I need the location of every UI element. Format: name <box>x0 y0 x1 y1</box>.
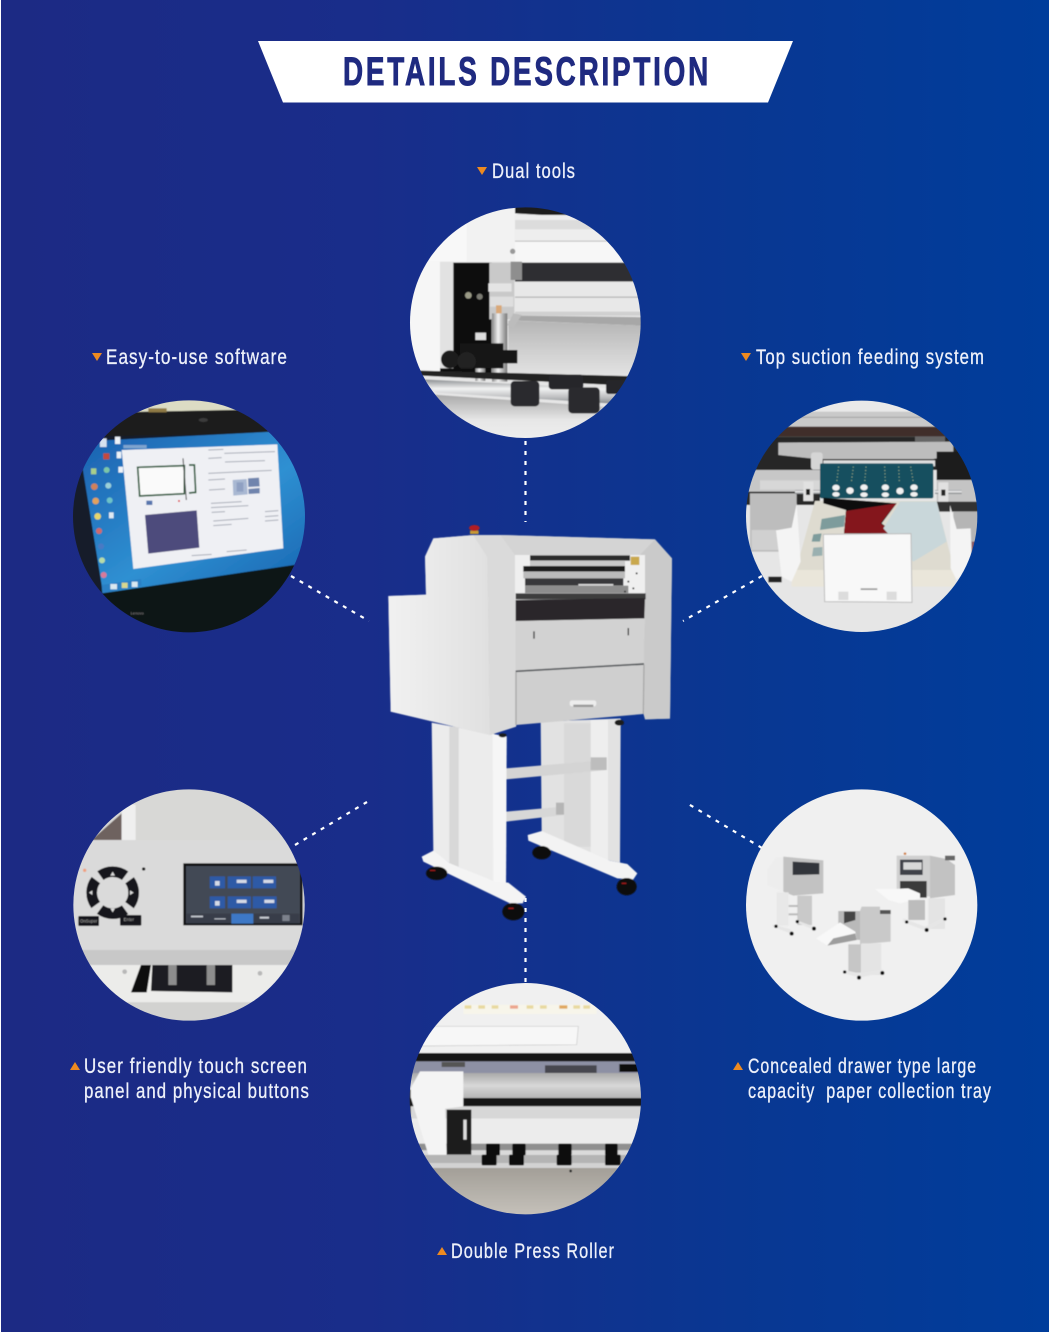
black guide bar <box>516 598 645 621</box>
connector: drawer circle to machine <box>685 802 762 848</box>
title banner <box>258 41 793 102</box>
label line 2: panel and physical buttons <box>84 1080 310 1103</box>
machine right side <box>640 539 672 719</box>
photo circle: double press roller <box>410 983 641 1214</box>
label: dual tools <box>477 160 576 183</box>
front leg <box>422 723 526 920</box>
back leg <box>528 718 637 895</box>
photo circle: easy-to-use software <box>73 400 305 632</box>
title text: DETAILS DESCRIPTION <box>343 50 711 94</box>
stand bolt <box>499 733 507 737</box>
connector: software circle to machine <box>291 576 369 621</box>
machine corner face <box>473 535 516 735</box>
connector: top circle to machine <box>524 441 527 522</box>
banner shape <box>258 41 793 102</box>
label: user friendly touch screen <box>70 1055 310 1103</box>
machine left body <box>388 535 490 735</box>
label text: Dual tools <box>492 160 576 183</box>
label text: Top suction feeding system <box>756 346 985 369</box>
crossbars <box>506 757 607 822</box>
machine top cover <box>501 535 655 555</box>
front panel <box>516 618 645 671</box>
photo circle: drawer paper collection tray <box>746 789 978 1021</box>
icon: up triangle <box>437 1247 447 1255</box>
photo circle: easy-to-use software: Lenovo <box>131 610 145 615</box>
machine body silhouette <box>388 535 672 735</box>
label: concealed drawer tray <box>733 1055 992 1103</box>
label line 1: Concealed drawer type large <box>748 1055 977 1078</box>
icon: down triangle <box>741 353 751 361</box>
connector: touch panel circle to machine <box>295 802 367 845</box>
connector: machine to roller circle <box>524 898 527 983</box>
label: top suction feeding system <box>741 346 985 369</box>
label text: Double Press Roller <box>451 1240 615 1263</box>
feed window <box>515 555 646 600</box>
photo circle: dual tools <box>410 207 641 438</box>
icon: down triangle <box>92 353 102 361</box>
photo circle: top suction feeding system <box>746 400 978 632</box>
label line 1: User friendly touch screen <box>84 1055 308 1078</box>
emergency stop button <box>469 525 480 534</box>
photo circle: touch panel and buttons <box>73 789 305 1021</box>
label: double press roller <box>437 1240 615 1263</box>
icon: up triangle <box>733 1062 743 1070</box>
main product: label cutting machine on stand <box>388 525 672 920</box>
foot pad <box>615 720 624 726</box>
photo circle: touch panel and buttons: OnSuper <box>80 919 98 924</box>
icon: up triangle <box>70 1062 80 1070</box>
photo circle: touch panel and buttons: Enter <box>124 917 135 922</box>
drawer <box>516 664 644 725</box>
label: easy-to-use software <box>92 346 288 369</box>
connector: suction circle to machine <box>683 576 762 621</box>
icon: down triangle <box>477 167 487 175</box>
label text: Easy-to-use software <box>106 346 288 369</box>
